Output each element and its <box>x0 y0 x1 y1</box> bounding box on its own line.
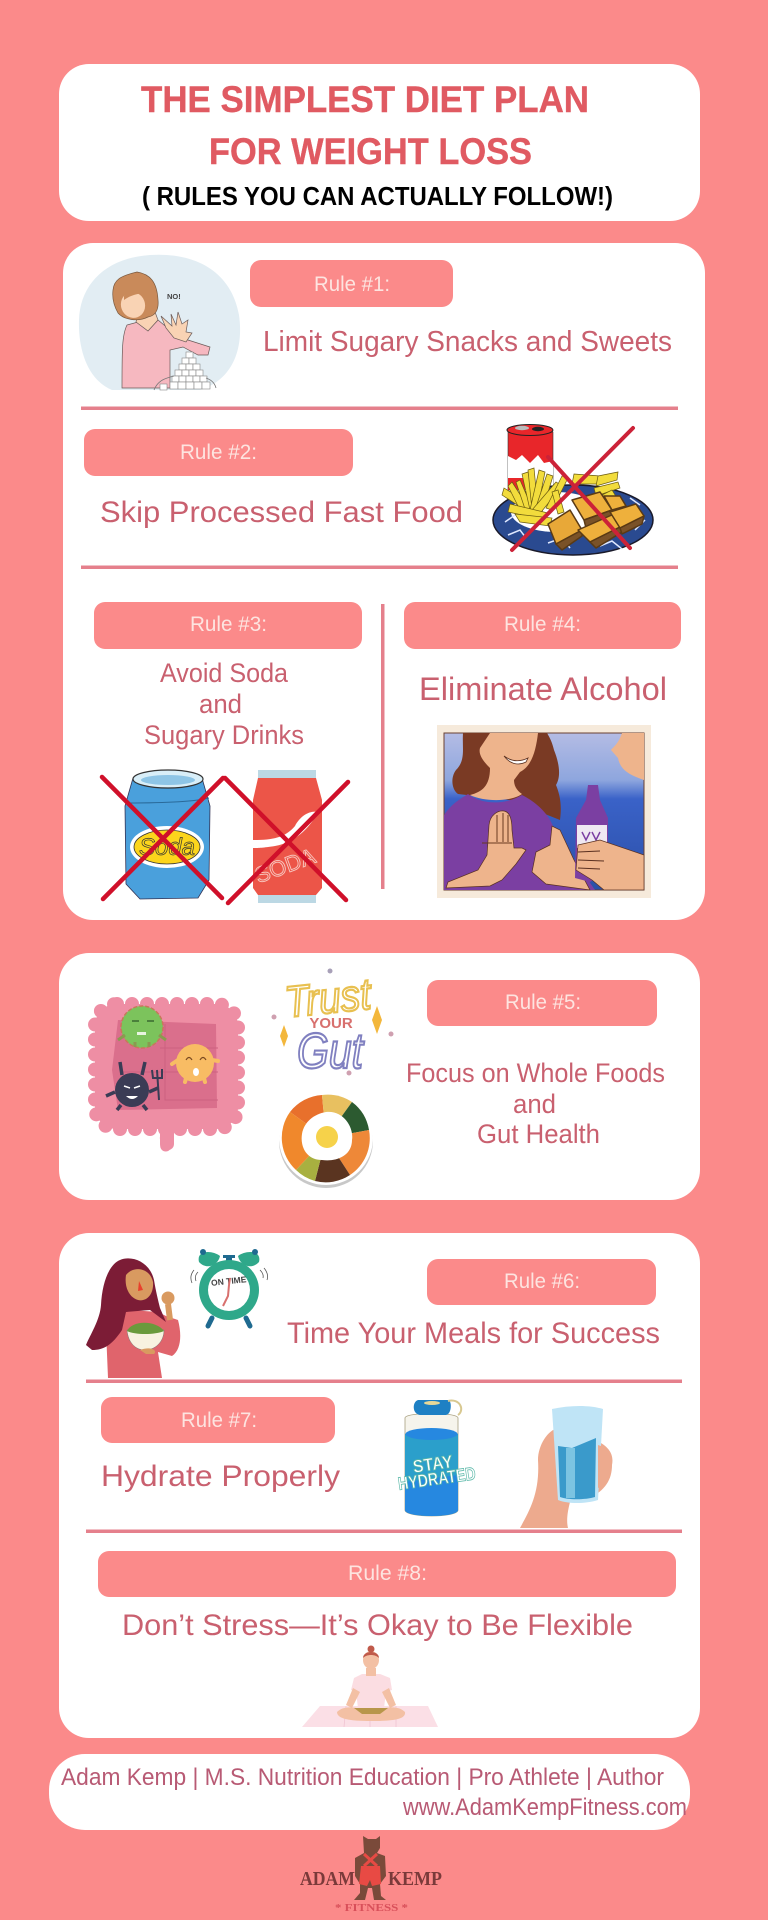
icon: trust your gut lettering: Trust <box>283 969 375 1027</box>
rule 3 text: and <box>199 689 242 719</box>
rule 2 text: Skip Processed Fast Food <box>100 496 463 529</box>
icon: trust your gut lettering <box>272 968 394 1079</box>
rule 2 label: Rule #2: <box>180 440 257 464</box>
rule 4 text: Eliminate Alcohol <box>419 671 667 707</box>
rule 2 label <box>84 429 353 476</box>
rule 3 text <box>144 658 304 750</box>
rule 5 text: Gut Health <box>477 1119 600 1149</box>
rule 5 label <box>427 980 657 1026</box>
panel: title <box>59 64 700 221</box>
rule 8 text: Don’t Stress—It’s Okay to Be Flexible <box>122 1609 633 1642</box>
rule 4 label: Rule #4: <box>504 612 581 636</box>
icon: refusing a bottle of alcohol <box>437 725 651 898</box>
logo: Adam Kemp Fitness: ADAM <box>300 1868 355 1890</box>
icon: bibimbap bowl <box>279 1091 373 1188</box>
logo: Adam Kemp Fitness: * FITNESS * <box>335 1902 409 1914</box>
logo: Adam Kemp Fitness <box>300 1836 442 1914</box>
credentials: Adam Kemp | M.S. Nutrition Education | Pro Athlete | Author <box>61 1764 664 1791</box>
icon: crossed-out fast food <box>493 424 653 555</box>
icon: woman eating salad <box>86 1258 180 1378</box>
logo: Adam Kemp Fitness: KEMP <box>388 1868 442 1890</box>
subtitle: ( RULES YOU CAN ACTUALLY FOLLOW!) <box>142 183 613 211</box>
icon: crossed-out soda cans: SODA <box>252 843 319 888</box>
panel: rule 5 <box>59 953 700 1200</box>
rule 6 label: Rule #6: <box>504 1269 580 1293</box>
rule 6 label <box>427 1259 656 1305</box>
rule 7 label: Rule #7: <box>181 1408 257 1432</box>
icon: hand holding a glass of water <box>520 1406 612 1528</box>
title line 1: THE SIMPLEST DIET PLAN <box>141 78 589 120</box>
icon: woman meditating <box>302 1646 438 1727</box>
icon: trust your gut lettering: YOUR <box>309 1015 353 1032</box>
rule 6 text: Time Your Meals for Success <box>287 1317 660 1350</box>
rule 1 label <box>250 260 453 307</box>
rule 3 text: Avoid Soda <box>160 658 288 688</box>
panel: rules 1 to 4 <box>63 243 705 920</box>
icon: stay hydrated bottle <box>395 1400 477 1516</box>
icon: gut with bacteria <box>95 1004 238 1152</box>
icon: woman refusing sugar: NO! <box>167 292 181 301</box>
rule 8 label <box>98 1551 676 1597</box>
rule 5 label: Rule #5: <box>505 990 581 1014</box>
icon: trust your gut lettering: Gut <box>297 1023 365 1079</box>
icon: stay hydrated bottle: STAY <box>412 1451 454 1477</box>
icon: stay hydrated bottle: HYDRATED <box>397 1463 477 1494</box>
rule 5 text: Focus on Whole Foods <box>406 1058 665 1088</box>
rule 3 label: Rule #3: <box>190 612 267 636</box>
panel: footer <box>49 1754 690 1830</box>
website: www.AdamKempFitness.com <box>402 1794 687 1821</box>
rule 1 label: Rule #1: <box>314 272 390 296</box>
rule 5 text <box>406 1058 665 1149</box>
rule 7 text: Hydrate Properly <box>101 1460 340 1493</box>
title line 2: FOR WEIGHT LOSS <box>209 130 532 172</box>
rule 1 text: Limit Sugary Snacks and Sweets <box>263 326 672 358</box>
rule 3 label <box>94 602 362 649</box>
icon: crossed-out soda cans <box>102 770 348 903</box>
rule 4 label <box>404 602 681 649</box>
icon: crossed-out soda cans: Soda <box>139 834 195 861</box>
icon: alarm clock <box>191 1249 268 1326</box>
icon: alarm clock: ON TIME <box>211 1274 247 1288</box>
rule 5 text: and <box>513 1089 556 1119</box>
rule 7 label <box>101 1397 335 1443</box>
icon: woman refusing sugar <box>79 255 240 390</box>
panel: rules 6 to 8 <box>59 1233 700 1738</box>
rule 8 label: Rule #8: <box>348 1561 427 1585</box>
rule 3 text: Sugary Drinks <box>144 720 304 750</box>
